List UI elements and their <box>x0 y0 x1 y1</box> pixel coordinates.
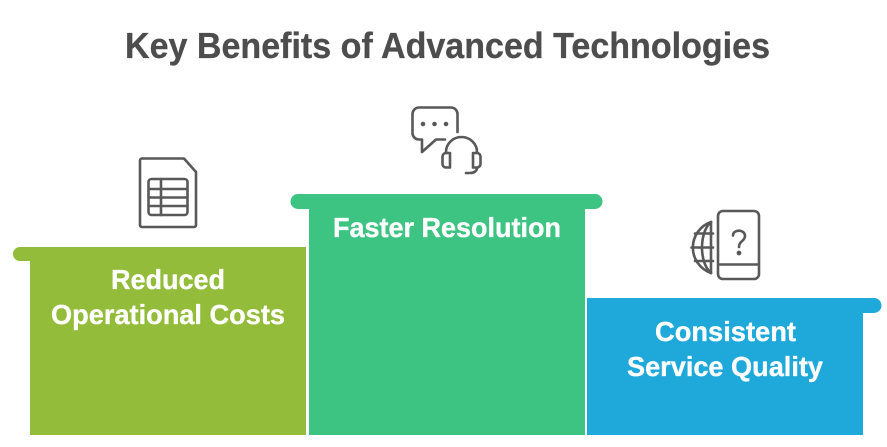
step bar: blue <box>587 298 882 435</box>
label: consistent service quality: Service Quality <box>627 351 823 382</box>
label: consistent service quality <box>627 316 823 382</box>
label: reduced operational costs: Reduced <box>111 264 225 295</box>
label: reduced operational costs: Operational Costs <box>51 299 285 330</box>
icon: globe and phone with question mark <box>692 211 759 279</box>
icon: document with table <box>140 158 196 227</box>
label: reduced operational costs <box>51 264 285 330</box>
label: faster resolution: Faster Resolution <box>333 212 561 243</box>
step bar: green <box>13 247 306 435</box>
step bar: teal green <box>290 194 602 435</box>
panel: reduced operational costs <box>13 247 306 435</box>
icon: chat bubble with headset <box>412 108 480 173</box>
panel: consistent service quality <box>587 298 882 435</box>
title: Key Benefits of Advanced Technologies <box>125 25 770 66</box>
label: consistent service quality: Consistent <box>655 316 796 347</box>
panel: faster resolution <box>290 194 602 435</box>
